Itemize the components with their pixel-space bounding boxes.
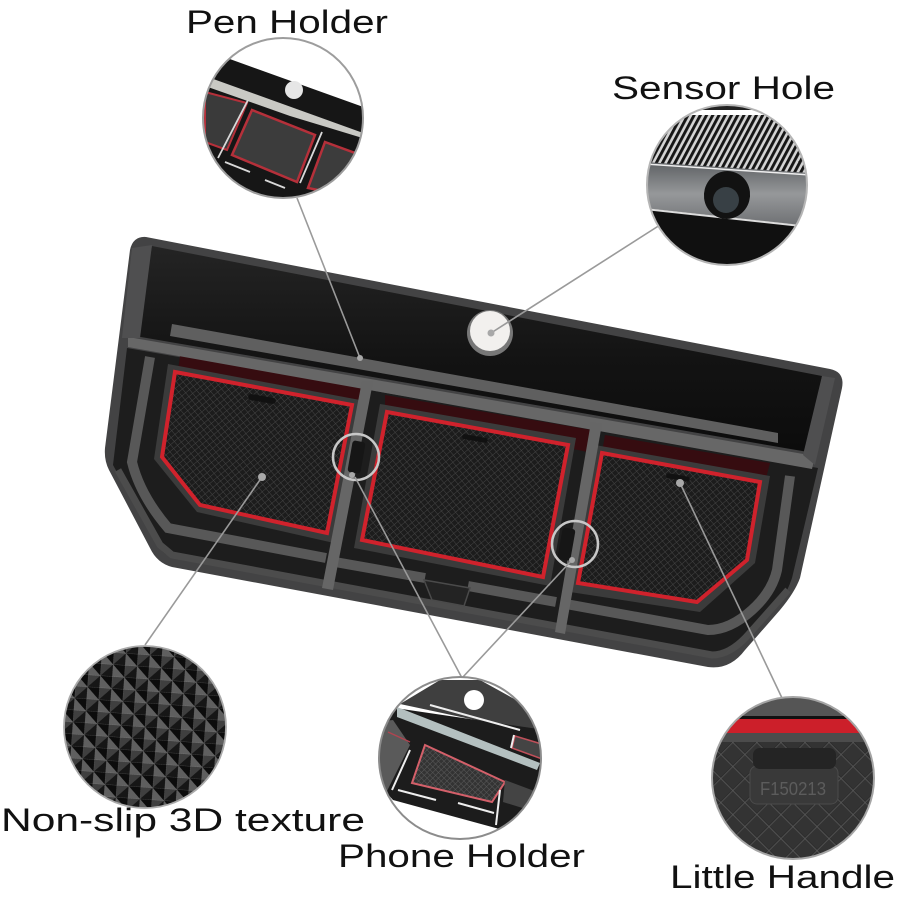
label: little handle: Little Handle bbox=[670, 859, 895, 895]
console tray product bbox=[105, 237, 843, 667]
lower well bbox=[113, 348, 818, 656]
left non-slip pad bbox=[154, 364, 360, 543]
vertical rib right bbox=[555, 422, 602, 634]
detail circle: little handle bbox=[711, 696, 875, 860]
callout circle: phone clip left bbox=[333, 434, 379, 480]
right side wall bbox=[803, 376, 835, 465]
label: non-slip 3D texture: Non-slip 3D texture bbox=[1, 802, 365, 838]
label: sensor hole: Sensor Hole bbox=[612, 70, 835, 106]
detail circle: phone holder bbox=[375, 675, 545, 845]
detail circle: pen holder bbox=[200, 36, 366, 210]
center non-slip pad bbox=[354, 404, 576, 586]
tray outer body bbox=[105, 237, 843, 667]
phone clip left bbox=[347, 440, 366, 474]
callout circle: phone clip right bbox=[552, 521, 598, 567]
inner floor lip bbox=[132, 357, 790, 630]
left side wall bbox=[122, 245, 152, 338]
handle part number: F150213 bbox=[760, 779, 826, 799]
detail circle: sensor hole bbox=[645, 100, 810, 270]
horizontal rib bbox=[128, 337, 815, 469]
center bottom notch bbox=[424, 580, 470, 606]
lower outer rim bbox=[118, 470, 788, 655]
detail circle: non-slip 3D texture bbox=[64, 646, 226, 808]
phone clip right bbox=[557, 527, 576, 561]
label: phone holder: Phone Holder bbox=[338, 838, 585, 874]
sensor hole bbox=[467, 310, 513, 356]
leader lines bbox=[145, 198, 782, 698]
right non-slip pad bbox=[570, 445, 770, 612]
red glow behind pads bbox=[178, 355, 770, 482]
leader dots bbox=[258, 330, 684, 563]
vertical rib left bbox=[322, 381, 373, 590]
label: pen holder: Pen Holder bbox=[186, 4, 388, 40]
pocket sill bbox=[170, 324, 778, 443]
upper pocket bbox=[135, 246, 822, 452]
